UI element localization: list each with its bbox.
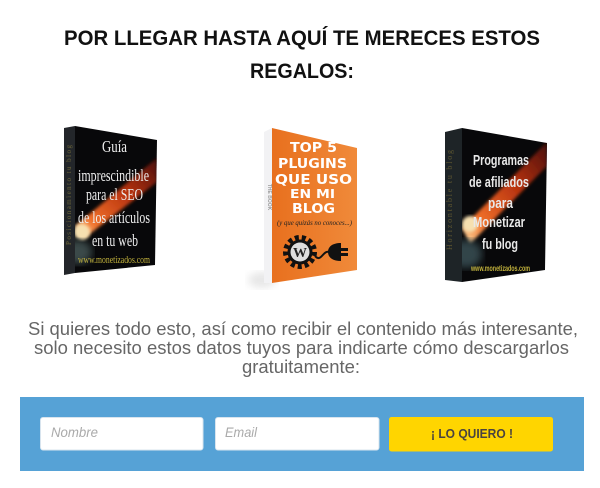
book: Affiliate programs: Monetizar [473, 214, 525, 231]
title: REGALOS: [250, 60, 354, 83]
input: Nombre [40, 418, 203, 450]
book: SEO guide: Guía [102, 137, 127, 156]
button: Lo quiero [389, 417, 553, 452]
book: Top 5 plugins: QUE USO [275, 173, 352, 188]
intro text: gratuitamente: [242, 356, 360, 377]
intro text: Si quieres todo esto, así como recibir el contenido más interesante, [28, 318, 578, 339]
book: Top 5 plugins: THE BOOK [266, 184, 272, 211]
title [64, 27, 540, 83]
book: Affiliate programs: para [488, 195, 514, 212]
book: SEO guide [64, 126, 157, 275]
title: POR LLEGAR HASTA AQUÍ TE MERECES ESTOS [64, 27, 540, 50]
book: Affiliate programs: de afiliados [469, 174, 529, 191]
book: SEO guide: imprescindible [78, 166, 149, 185]
input: Email: Email [225, 424, 258, 440]
signup form panel [20, 397, 584, 471]
book: SEO guide: Posicionamiento tu blog [65, 145, 73, 245]
book: Top 5 plugins: (y que quizás no conoces...) [277, 219, 353, 227]
book: Top 5 plugins: TOP 5 [290, 141, 337, 156]
icon: WordPress gear and plug [286, 238, 348, 266]
input: Email [216, 418, 379, 450]
book: SEO guide: en tu web [92, 231, 138, 250]
book: Affiliate programs: fu blog [482, 236, 518, 253]
book: Affiliate programs: www.monetizados.com [470, 264, 530, 273]
book: SEO guide: de los artículos [78, 208, 150, 227]
book: SEO guide: para el SEO [86, 185, 143, 204]
book: Affiliate programs [445, 128, 547, 282]
book: Top 5 plugins: BLOG [292, 202, 335, 217]
book: Top 5 plugins: PLUGINS [278, 157, 347, 172]
book: Affiliate programs: Horizontable tu blog [445, 150, 454, 250]
intro text: solo necesito estos datos tuyos para indicarte cómo descargarlos [34, 337, 569, 358]
intro text [28, 318, 578, 377]
book: Top 5 plugins [248, 128, 357, 288]
button: Lo quiero: ¡ LO QUIERO ! [431, 426, 513, 441]
book: Top 5 plugins: EN MI [290, 186, 335, 201]
book: Affiliate programs: Programas [473, 152, 529, 169]
icon: WordPress gear and plug: W [293, 246, 307, 261]
input: Nombre: Nombre [51, 424, 98, 440]
book: SEO guide: www.monetizados.com [78, 255, 150, 266]
